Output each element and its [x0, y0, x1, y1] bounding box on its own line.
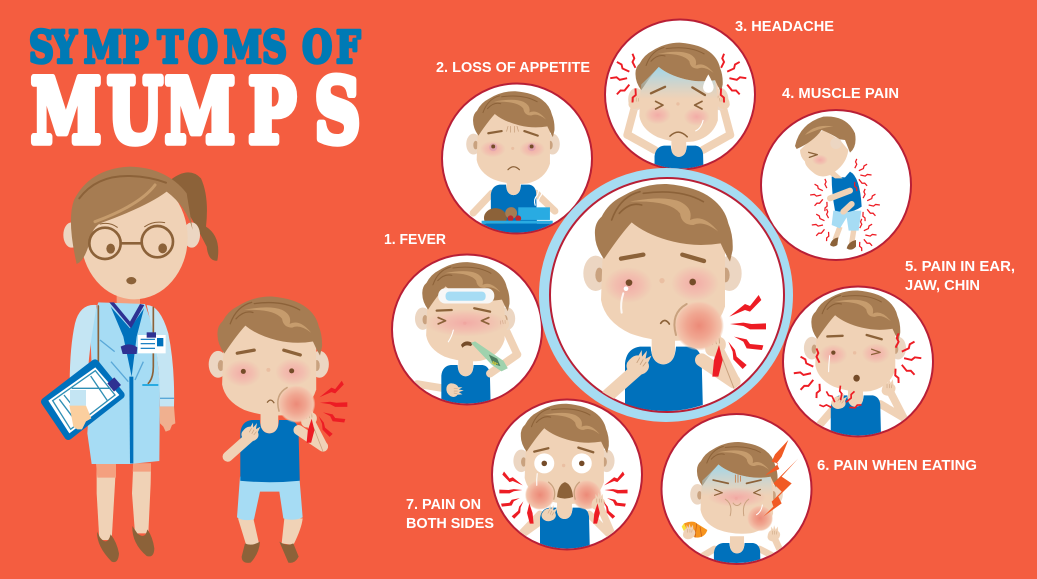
- doctor coat: [70, 302, 174, 464]
- doctor ponytail: [168, 172, 218, 261]
- label 5: [905, 259, 1015, 294]
- boy with fever: [415, 262, 517, 417]
- circle: [605, 20, 755, 170]
- label 7: BOTH SIDES: [406, 516, 494, 532]
- panel: loss of appetite: [442, 84, 592, 235]
- label 7: [406, 497, 494, 532]
- panel: main swollen cheek: [539, 168, 793, 429]
- panel: muscle pain: [761, 110, 911, 260]
- doctor neck: [117, 293, 140, 317]
- panel: headache: [604, 18, 756, 170]
- boy illustration: [209, 296, 347, 563]
- thermometer: [471, 341, 508, 371]
- label 1: 1. FEVER: [384, 232, 447, 248]
- doctor legs: [96, 463, 154, 562]
- circle: [492, 400, 642, 550]
- heading: symptoms of: SYMPTOMS OF: [29, 22, 361, 74]
- circle: [442, 84, 592, 234]
- label 7: 7. PAIN ON: [406, 497, 481, 513]
- boy holding side: [795, 117, 880, 251]
- cool forehead: [640, 67, 717, 94]
- label 2: 2. LOSS OF APPETITE: [436, 60, 590, 76]
- main boy: [583, 184, 766, 429]
- label 3: 3. HEADACHE: [735, 19, 834, 35]
- panel: pain on both sides: [492, 400, 642, 560]
- doctor illustration: [45, 167, 218, 562]
- boy shorts and legs: [237, 477, 303, 563]
- label 4: 4. MUSCLE PAIN: [782, 86, 899, 102]
- cold pack: [438, 288, 494, 303]
- steam: [535, 187, 542, 205]
- thermometer: 39°: [491, 360, 499, 367]
- boy with headache: [610, 43, 746, 198]
- panel: fever: [392, 254, 542, 417]
- boy eating: [682, 440, 798, 563]
- doctor right hand: [159, 407, 175, 432]
- label 6: 6. PAIN WHEN EATING: [817, 458, 977, 474]
- circle: [392, 254, 542, 404]
- boy with swollen cheeks: [499, 404, 628, 560]
- title: [29, 22, 361, 164]
- label 5: JAW, CHIN: [905, 278, 980, 294]
- id badge: [138, 332, 166, 353]
- circle: [662, 414, 812, 564]
- inner circle: [550, 178, 784, 412]
- boy with food: [466, 91, 560, 235]
- heading: mumps: MUMPS: [31, 61, 360, 164]
- boy upper body and head: [209, 296, 347, 482]
- clipboard: [45, 363, 121, 436]
- circle: [761, 110, 911, 260]
- doctor head: [63, 167, 200, 299]
- lightning bolts and snack: [682, 440, 798, 539]
- table and food: [482, 207, 553, 232]
- blue ring: [539, 168, 793, 422]
- panel: pain when eating: [662, 414, 812, 579]
- panel: pain in ear, jaw, chin: [783, 286, 933, 448]
- circle: [783, 286, 933, 436]
- boy with jaw pain: [794, 290, 921, 448]
- label 5: 5. PAIN IN EAR,: [905, 259, 1015, 275]
- fever flush: [432, 312, 499, 334]
